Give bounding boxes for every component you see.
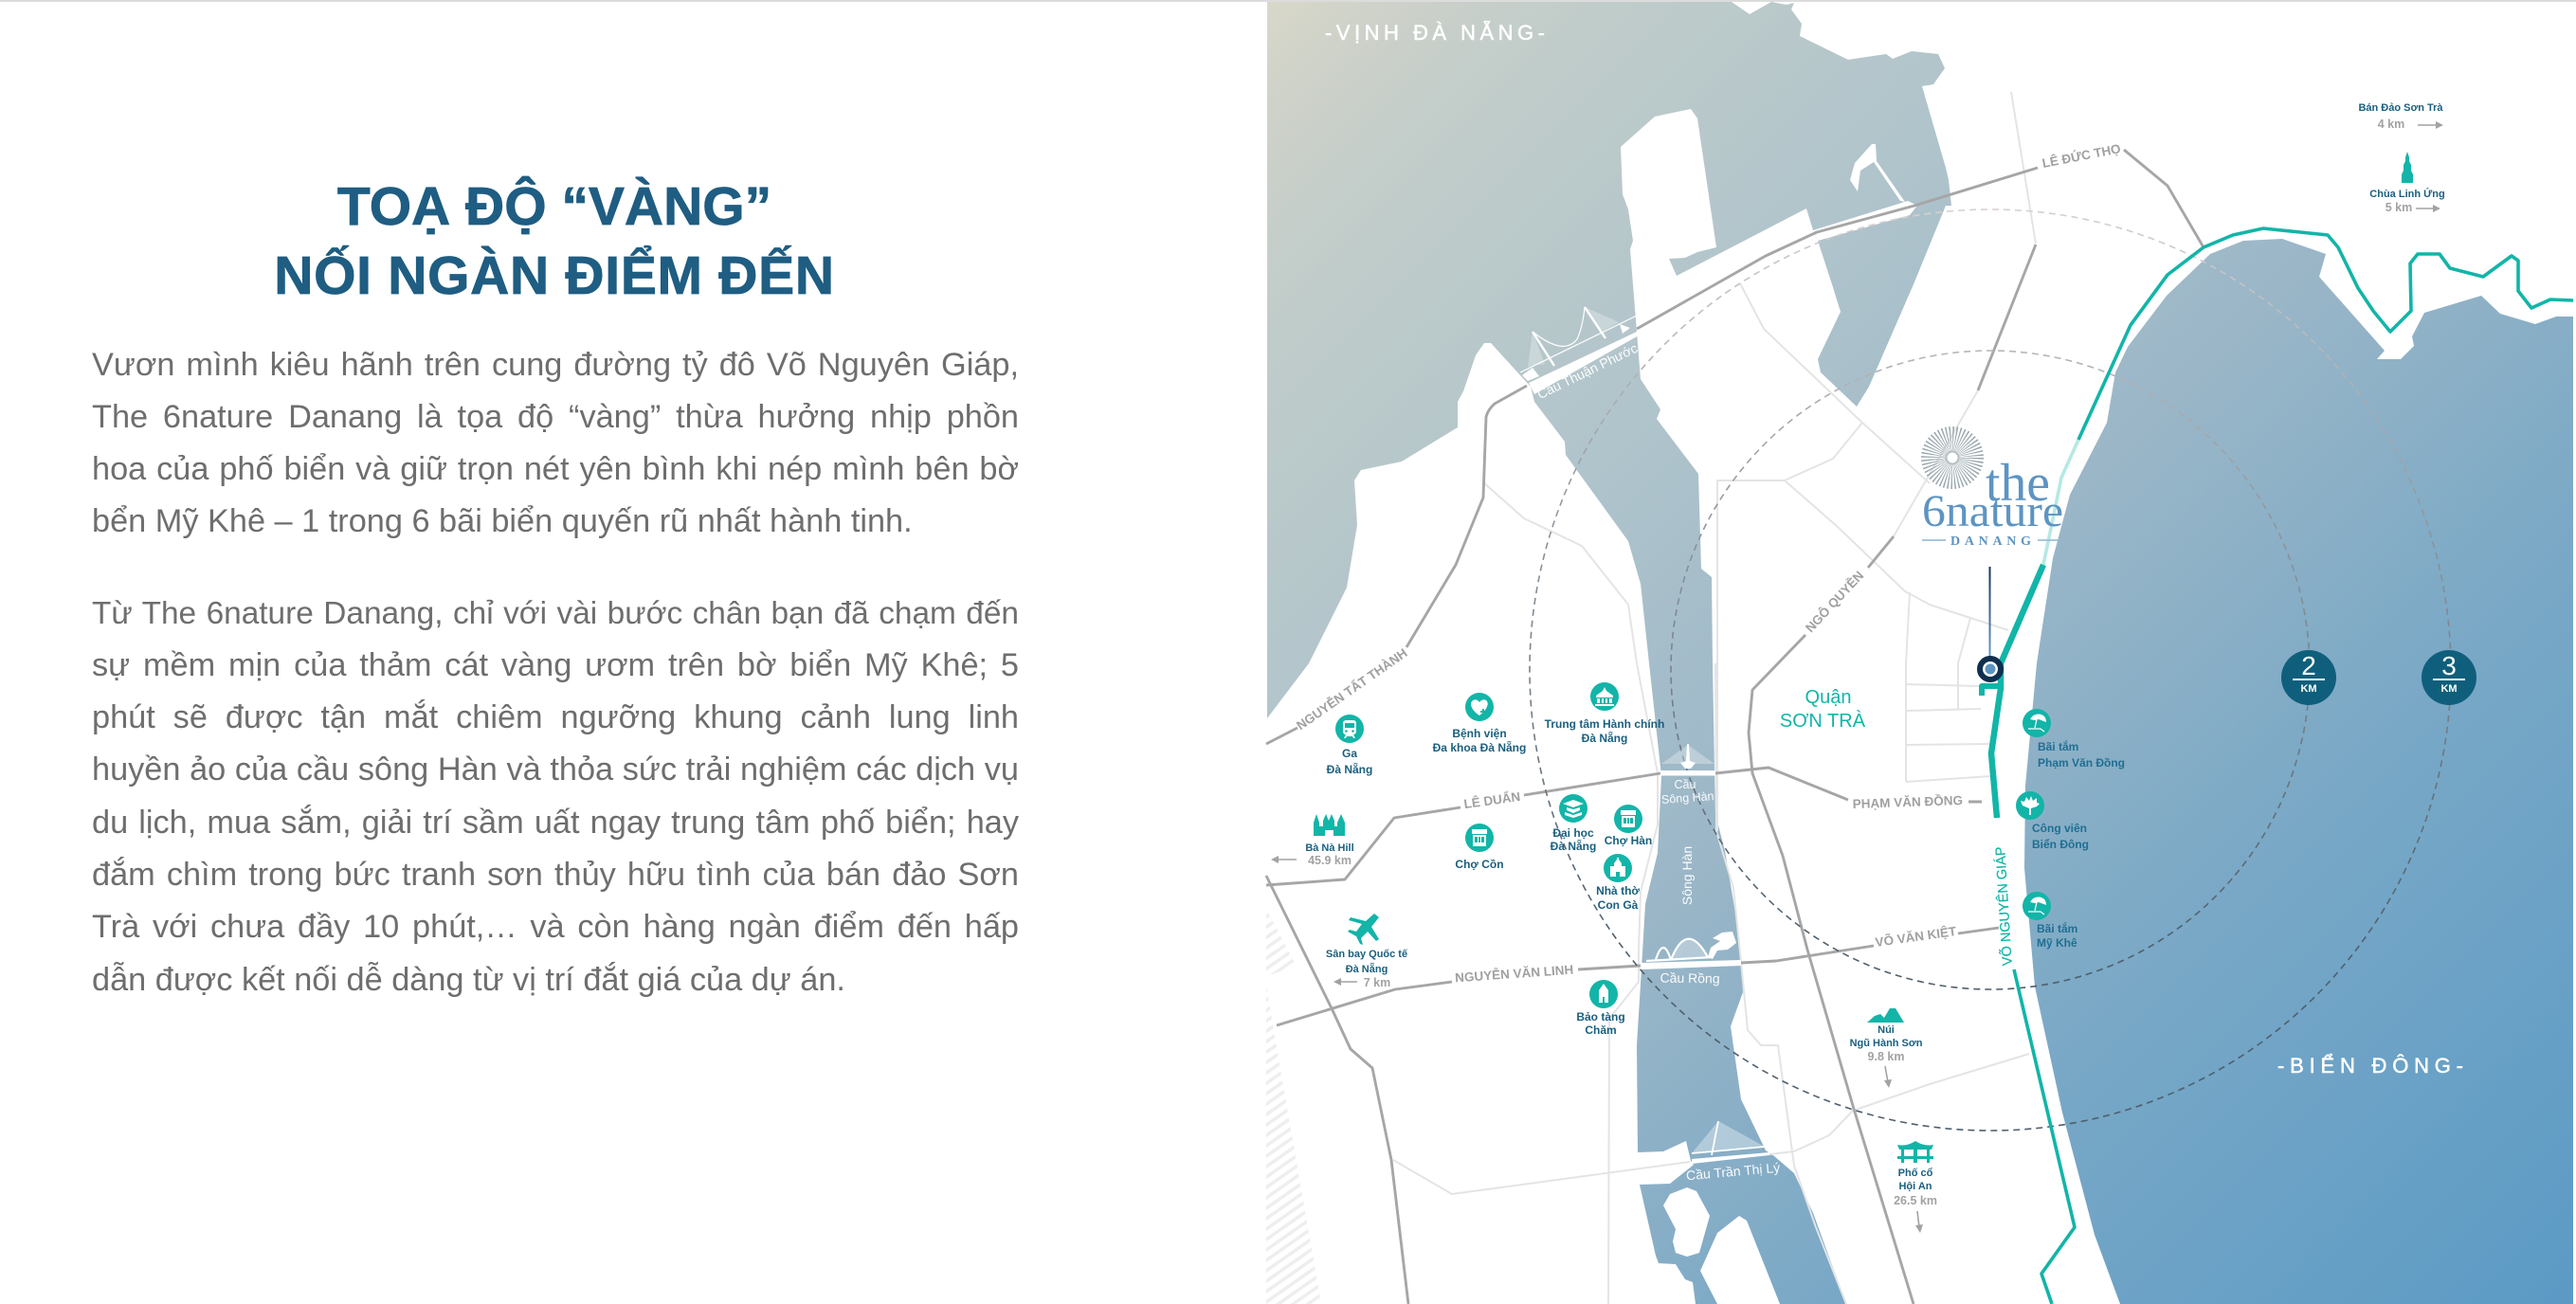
icon: church: [1604, 854, 1632, 882]
label: Bien Dong park: Công viên: [2032, 822, 2087, 835]
text block: destinations paragraph: du lịch, mua sắm, giải trí sầm uất ngay trung tâm phố biển; hay: [92, 805, 1019, 841]
map label: Bien Dong: -BIỂN ĐÔNG-: [2277, 1054, 2463, 1078]
arrow: to Son Tra: [2418, 121, 2443, 129]
label: Pham Van Dong beach: Phạm Văn Đồng: [2038, 756, 2125, 770]
label: church: Nhà thờ: [1596, 884, 1640, 897]
label: Ngu Hanh Son: [1850, 1024, 1923, 1063]
label: Hoi An: 26.5 km: [1894, 1194, 1937, 1207]
text block: intro paragraph: Vươn mình kiêu hãnh trên cung đường tỷ đô Võ Nguyên Giáp,: [92, 347, 1019, 383]
label: Linh Ung pagoda: Chùa Linh Ứng: [2369, 188, 2445, 200]
road labels: LÊ ĐỨC THỌ: [2041, 141, 2122, 171]
label: church: [1596, 884, 1640, 912]
label: Cho Con: Chợ Cồn: [1455, 858, 1504, 871]
text block: intro paragraph: hoa của phố biển và giữ trọn nét yên bình khi nép mình bên bờ: [92, 451, 1019, 487]
text block: destinations paragraph: sự mềm mịn của thảm cát vàng ươm trên bờ biển Mỹ Khê; 5: [92, 647, 1019, 683]
label: airport: [1326, 949, 1408, 989]
text block: destinations paragraph: phút sẽ được tận mắt chiêm ngưỡng khung cảnh lung linh: [92, 699, 1019, 735]
label: hospital: Đa khoa Đà Nẵng: [1433, 740, 1526, 754]
label: church: Con Gà: [1598, 898, 1639, 912]
road labels: NGÔ QUYỀN: [1803, 569, 1866, 635]
road labels: LÊ DUẨN: [1463, 789, 1521, 811]
icon: My Khe beach: [2023, 892, 2051, 920]
label: Ngu Hanh Son: Ngũ Hành Sơn: [1850, 1038, 1923, 1049]
text block: destinations paragraph: Trà với chưa đầy 10 phút,… và còn hàng ngàn điểm đến hấp: [92, 909, 1019, 945]
arrow: to airport: [1333, 978, 1357, 986]
text block: intro paragraph: [92, 347, 1019, 539]
label: Pham Van Dong beach: [2038, 739, 2125, 770]
icon: Ngu Hanh Son mountain: [1867, 1008, 1904, 1023]
label: Ngu Hanh Son: 9.8 km: [1868, 1050, 1904, 1063]
text block: destinations paragraph: [92, 595, 1019, 998]
bridge: Song Han: [1660, 744, 1715, 775]
bridge label: Cau Thuan Phuoc: Cầu Thuận Phước: [1534, 340, 1640, 402]
water: Da Nang bay and Han river: [1267, 2, 1951, 1304]
hatched area: [1266, 909, 1321, 1304]
label: hospital: Bệnh viện: [1452, 727, 1507, 740]
river label: Song Han: Sông Hàn: [1679, 846, 1695, 905]
text block: destinations paragraph: dẫn được kết nối dễ dàng từ vị trí đắt giá của dự án.: [92, 962, 845, 998]
distance badge: 2 km: [2281, 650, 2336, 705]
icon: Cho Han: [1614, 805, 1642, 833]
road: Le Duc Tho: [1266, 150, 2204, 744]
road labels: NGUYỄN TẤT THÀNH: [1294, 645, 1410, 733]
district label: Quan Son Tra: SƠN TRÀ: [1780, 710, 1866, 732]
bridge label: Cau Song Han: Sông Hàn: [1660, 789, 1714, 806]
title: [274, 176, 835, 306]
label: My Khe beach: Mỹ Khê: [2037, 936, 2077, 950]
label: university: [1551, 826, 1596, 853]
project logo: DANANG: [1950, 534, 2031, 549]
road: western arterial: [1266, 876, 1408, 1304]
road: Nguyen Van Linh and Vo Van Kiet: [1277, 928, 1999, 1025]
label: My Khe beach: [2037, 921, 2077, 950]
district label: Quan Son Tra: Quận: [1805, 687, 1851, 708]
text block: intro paragraph: bển Mỹ Khê – 1 trong 6 bãi biển quyến rũ nhất hành tinh.: [92, 503, 913, 539]
label: Pham Van Dong beach: Bãi tắm: [2038, 739, 2078, 753]
icon: airplane: [1348, 914, 1379, 945]
text block: destinations paragraph: Từ The 6nature Danang, chỉ với vài bước chân bạn đã chạm đến: [92, 595, 1019, 631]
label: Bien Dong park: [2032, 822, 2089, 851]
label: Hoi An: Phố cổ: [1898, 1168, 1933, 1179]
bridge label: Cau Song Han: [1660, 778, 1714, 806]
bridge: Dragon: [1642, 932, 1741, 969]
bridge: Tran Thi Ly: [1692, 1121, 1769, 1164]
label: university: Đà Nẵng: [1551, 839, 1596, 853]
road labels: [1294, 141, 2122, 985]
arrow: to Hoi An: [1915, 1211, 1923, 1233]
project logo: the: [1986, 454, 2050, 513]
distance badge: 3 km: KM: [2440, 683, 2458, 695]
icon: Cho Con: [1465, 824, 1494, 852]
road: Le Duan and Pham Van Dong: [1266, 768, 1982, 885]
label: Cham museum: Bảo tàng: [1576, 1010, 1625, 1023]
label: administration center: Đà Nẵng: [1582, 731, 1627, 745]
label: Linh Ung pagoda: [2369, 188, 2445, 214]
label: Hoi An: [1894, 1168, 1937, 1207]
road labels: PHẠM VĂN ĐỒNG: [1852, 793, 1963, 811]
icon: Hoi An bridge: [1897, 1141, 1933, 1163]
icon: Linh Ung pagoda: [2402, 152, 2413, 183]
label: Ga Da Nang: [1327, 747, 1372, 776]
island in the river: [1663, 1187, 1710, 1257]
distance badge: 3 km: 3: [2441, 651, 2457, 680]
label: Linh Ung pagoda: 5 km: [2386, 201, 2412, 214]
distance badge: 2 km: 2: [2301, 651, 2316, 680]
bridge label: Cau Tran Thi Ly: Cầu Trần Thị Lý: [1685, 1160, 1781, 1183]
icon: Ba Na Hill castle: [1314, 814, 1345, 836]
road label: Vo Nguyen Giap: VÕ NGUYÊN GIÁP: [1992, 846, 2016, 967]
icon: hospital: [1465, 693, 1494, 721]
label: airport: Đà Nẵng: [1346, 963, 1388, 975]
label: Ga Da Nang: Ga: [1342, 747, 1357, 760]
text block: destinations paragraph: huyền ảo của cầu sông Hàn và thỏa sức trải nghiệm các dịch vụ: [92, 752, 1019, 788]
road labels: NGUYỄN VĂN LINH: [1455, 963, 1574, 985]
project logo: 6nature: [1922, 486, 2063, 536]
icon: Ga Da Nang: [1335, 715, 1364, 743]
label: Cham museum: [1576, 1010, 1625, 1037]
label: Son Tra peninsula: Bán Đảo Sơn Trà: [2358, 102, 2443, 114]
label: airport: Sân bay Quốc tế: [1326, 949, 1408, 960]
distance badge: 3 km: [2422, 650, 2476, 705]
icon: Cham museum: [1589, 980, 1618, 1008]
text block: destinations paragraph: đắm chìm trong bức tranh sơn thủy hữu tình của bán đảo Sơn: [92, 857, 1019, 893]
title: NỐI NGÀN ĐIỂM ĐẾN: [274, 245, 835, 306]
road: Ngo Quyen: [1749, 244, 2036, 1304]
arrow: to Ba Na Hill: [1271, 856, 1297, 863]
bridge: Thuan Phuoc: [1520, 307, 1639, 394]
district label: Quan Son Tra: [1780, 687, 1866, 732]
minor streets: [1393, 92, 2036, 1304]
icon: university: [1559, 794, 1587, 823]
water: East Sea: [2024, 239, 2573, 1304]
label: administration center: [1545, 717, 1664, 745]
title: TOẠ ĐỘ “VÀNG”: [337, 176, 771, 237]
arrow: to Ngu Hanh Son: [1884, 1066, 1892, 1088]
label: Ngu Hanh Son: Núi: [1878, 1024, 1895, 1036]
dashed radius circles: [1530, 209, 2451, 1131]
label: university: Đại học: [1552, 826, 1594, 840]
label: Ba Na Hill: 45.9 km: [1308, 854, 1351, 867]
project logo: [1922, 439, 2063, 549]
label: Son Tra peninsula: [2358, 102, 2443, 131]
project location marker: [1980, 567, 2001, 679]
label: Ba Na Hill: Bà Nà Hill: [1305, 842, 1354, 854]
label: Cho Han: Chợ Hàn: [1605, 834, 1652, 847]
bridge label: Cau Rong: Cầu Rồng: [1660, 969, 1720, 987]
label: Hoi An: Hội An: [1898, 1181, 1932, 1192]
text block: intro paragraph: The 6nature Danang là tọa độ “vàng” thừa hưởng nhịp phồn: [92, 399, 1019, 435]
label: Son Tra peninsula: 4 km: [2378, 118, 2404, 131]
bridge label: Cau Song Han: Cầu: [1675, 778, 1696, 791]
islet in the bay: [1850, 144, 1905, 202]
icon: administration center: [1590, 682, 1619, 711]
label: Ga Da Nang: Đà Nẵng: [1327, 762, 1372, 776]
label: Cham museum: Chăm: [1585, 1023, 1617, 1037]
icon: Pham Van Dong beach: [2023, 709, 2051, 737]
label: hospital: [1433, 727, 1526, 754]
map label: Vinh Da Nang: -VỊNH ĐÀ NẴNG-: [1325, 21, 1545, 45]
arrow: to Linh Ung: [2416, 205, 2440, 212]
distance badge: 2 km: KM: [2300, 683, 2317, 695]
icon: Bien Dong park: [2016, 791, 2044, 820]
label: Bien Dong park: Biển Đông: [2032, 838, 2089, 851]
road labels: VÕ VĂN KIỆT: [1875, 924, 1958, 950]
label: administration center: Trung tâm Hành chính: [1545, 717, 1664, 731]
road: Vo Nguyen Giap: [1982, 228, 2573, 1304]
label: airport: 7 km: [1364, 976, 1390, 989]
label: My Khe beach: Bãi tắm: [2037, 921, 2077, 935]
label: Ba Na Hill: [1305, 842, 1354, 867]
causeway across the bay: [1813, 201, 1917, 241]
